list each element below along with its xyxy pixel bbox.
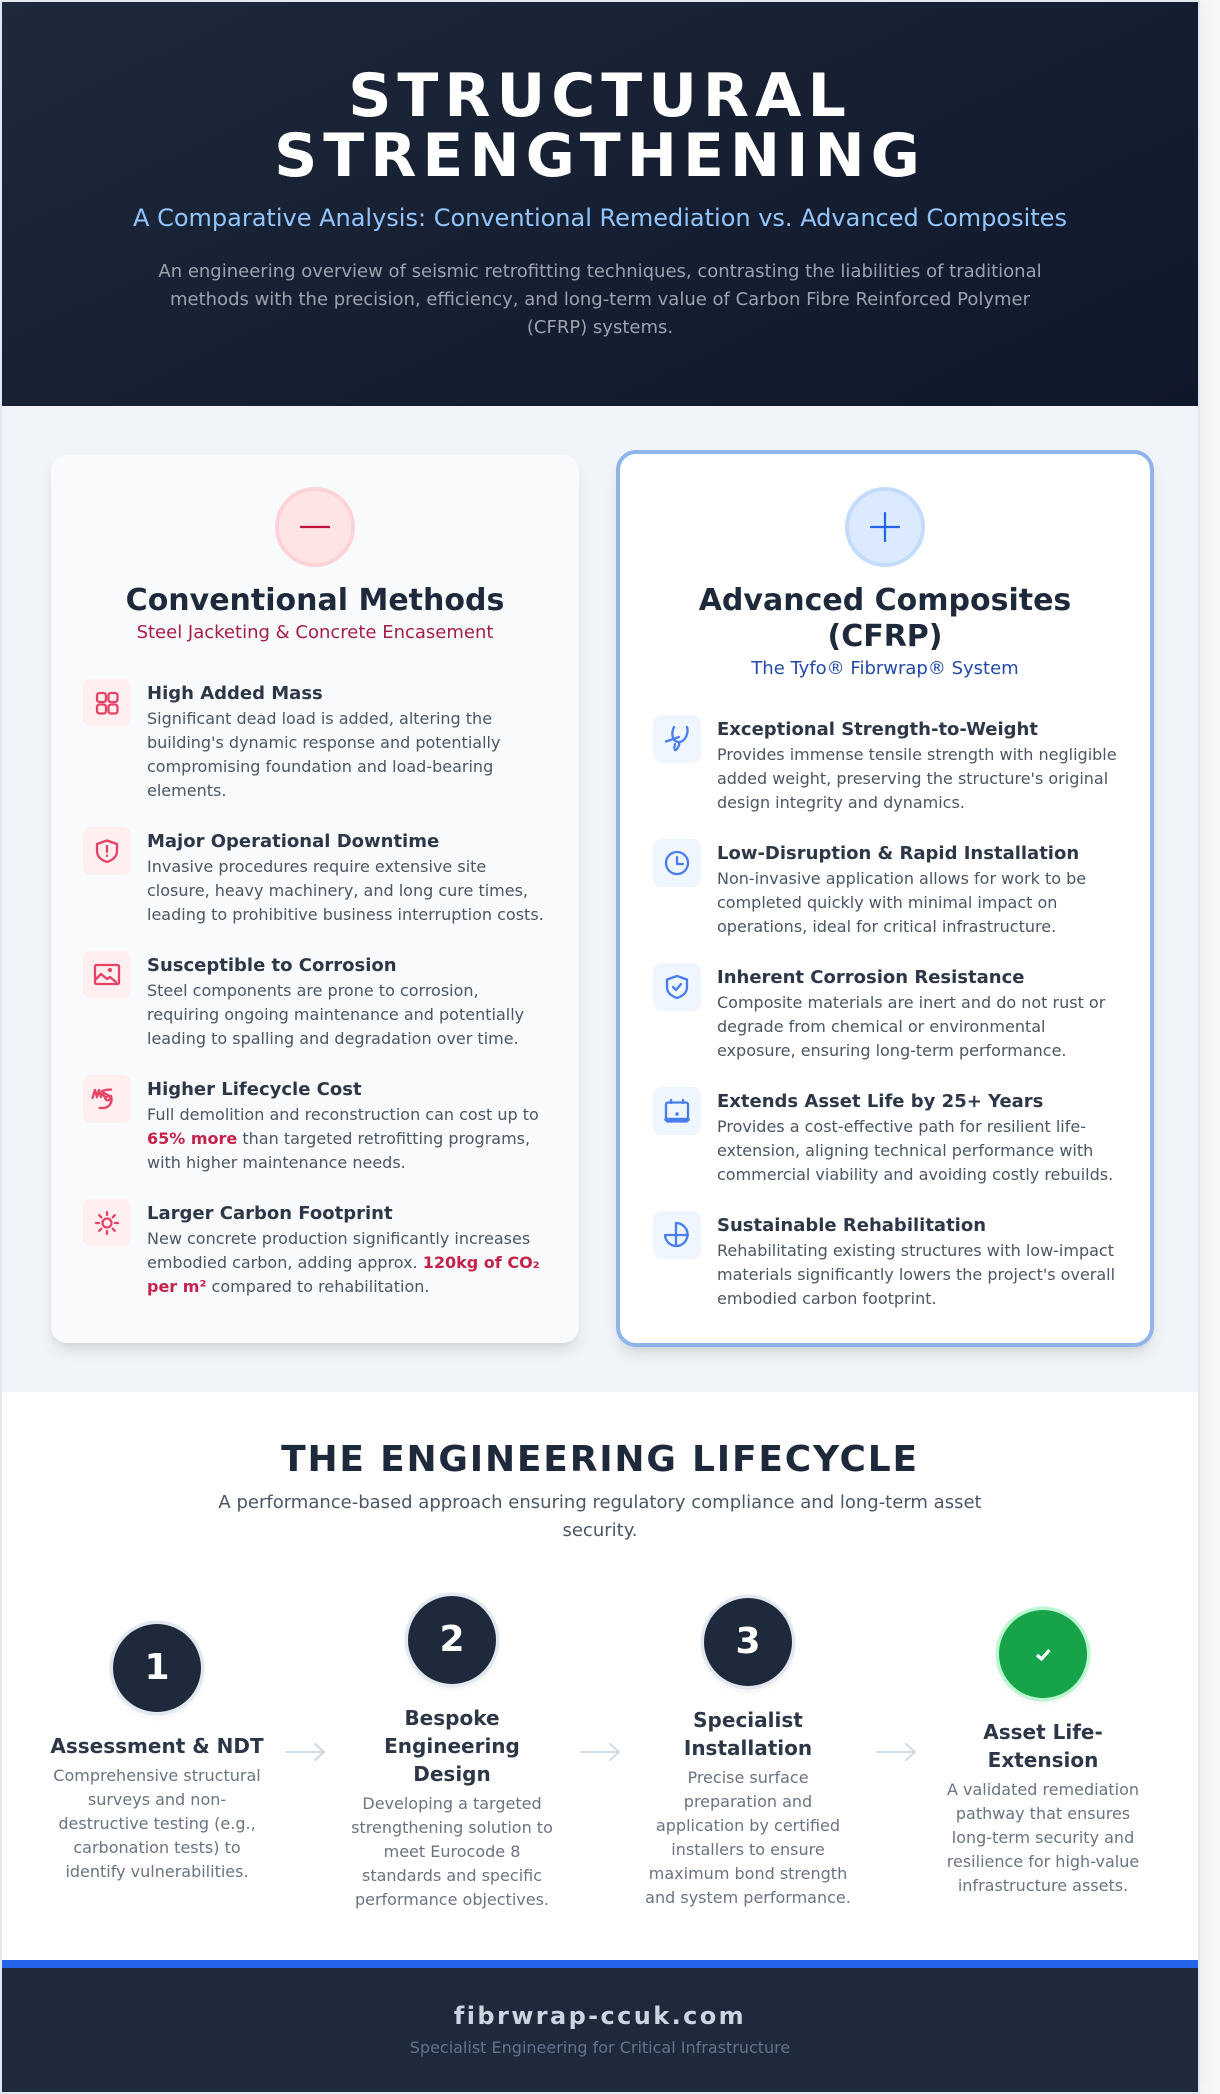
item text: Provides a cost-effective path for resilient life- (717, 1117, 1086, 1136)
step number (113, 1624, 201, 1712)
title: STRENGTHENING (274, 121, 926, 191)
icon: plus circle (845, 487, 925, 567)
step text (351, 1794, 553, 1909)
subtitle: A Comparative Analysis: Conventional Remediation vs. Advanced Composites (133, 204, 1067, 232)
item text: Provides immense tensile strength with negligible (717, 745, 1117, 764)
item text (147, 709, 500, 800)
item text: with higher maintenance needs. (147, 1153, 406, 1172)
step number (704, 1598, 792, 1686)
item text: operations, ideal for critical infrastructure. (717, 917, 1056, 936)
item text: exposure, ensuring long-term performance. (717, 1041, 1067, 1060)
panel: conventional methods (51, 455, 579, 1343)
item: asset life (653, 1087, 1113, 1184)
step text: identify vulnerabilities. (65, 1862, 249, 1881)
item text: elements. (147, 781, 226, 800)
step text: Comprehensive structural (53, 1766, 261, 1785)
step title: Bespoke (404, 1706, 500, 1730)
item text (717, 993, 1106, 1060)
step title: Specialist (693, 1708, 803, 1732)
item text (147, 981, 524, 1048)
step text: carbonation tests) to (73, 1838, 241, 1857)
subheading: The Tyfo® Fibrwrap® System (751, 658, 1019, 679)
item title: High Added Mass (147, 683, 323, 704)
heading: (CFRP) (827, 619, 943, 654)
item text: materials significantly lowers the project's overall (717, 1265, 1115, 1284)
item text: degrade from chemical or environmental (717, 1017, 1046, 1036)
step text (947, 1780, 1139, 1895)
item text: commercial viability and avoiding costly rebuilds. (717, 1165, 1113, 1184)
heading (698, 583, 1071, 654)
step 4 (947, 1606, 1139, 1895)
step text: performance objectives. (355, 1890, 549, 1909)
item text: added weight, preserving the structure's original (717, 769, 1108, 788)
item text: Steel components are prone to corrosion, (147, 981, 479, 1000)
item text: closure, heavy machinery, and long cure times, (147, 881, 528, 900)
lifecycle subheading: security. (562, 1520, 638, 1541)
icon: sun (83, 1199, 131, 1247)
header description (158, 261, 1042, 338)
item text: Rehabilitating existing structures with low-impact (717, 1241, 1114, 1260)
item title: Sustainable Rehabilitation (717, 1215, 986, 1236)
step title (384, 1706, 520, 1786)
footer tagline: Specialist Engineering for Critical Infrastructure (410, 2038, 790, 2057)
step 2 (351, 1592, 553, 1909)
item text: requiring ongoing maintenance and potentially (147, 1005, 524, 1024)
footer website: fibrwrap-ccuk.com (454, 2002, 746, 2030)
arrow 2 (580, 1743, 620, 1761)
step text: infrastructure assets. (958, 1876, 1128, 1895)
step check icon (999, 1610, 1087, 1698)
item text: completed quickly with minimal impact on (717, 893, 1057, 912)
icon: shield check (653, 963, 701, 1011)
item text (717, 869, 1086, 936)
heading: Conventional Methods (126, 583, 504, 618)
lifecycle heading: THE ENGINEERING LIFECYCLE (281, 1439, 919, 1480)
item text (147, 1105, 539, 1172)
item: high added mass (83, 679, 500, 800)
item text: Invasive procedures require extensive site (147, 857, 486, 876)
title (274, 61, 926, 191)
step text: meet Eurocode 8 (384, 1842, 520, 1861)
step text: strengthening solution to (351, 1818, 553, 1837)
lifecycle subheading (218, 1492, 982, 1541)
step text (645, 1768, 851, 1907)
icon: shield alert (83, 827, 131, 875)
item title: Susceptible to Corrosion (147, 955, 397, 976)
item title: Low-Disruption & Rapid Installation (717, 843, 1079, 864)
item: higher lifecycle cost (83, 1075, 539, 1172)
icon: stethoscope squiggle (653, 715, 701, 763)
step text: application by certified (656, 1816, 840, 1835)
step text: long-term security and (952, 1828, 1134, 1847)
header description: methods with the precision, efficiency, and long-term value of Carbon Fibre Reinforced Polymer (170, 289, 1030, 310)
icon: squiggle (83, 1075, 131, 1123)
item text: design integrity and dynamics. (717, 793, 965, 812)
item text (147, 1229, 540, 1296)
step text: maximum bond strength (649, 1864, 847, 1883)
panel: advanced composites (616, 450, 1154, 1347)
title: STRUCTURAL (348, 61, 852, 131)
item text: 65% more than targeted retrofitting programs, (147, 1129, 530, 1148)
icon: image (83, 951, 131, 999)
step text: standards and specific (362, 1866, 542, 1885)
item: low disruption (653, 839, 1086, 936)
step number: 3 (735, 1621, 761, 1662)
item text: building's dynamic response and potentially (147, 733, 500, 752)
arrow 1 (285, 1743, 325, 1761)
item: major operational downtime (83, 827, 544, 924)
item title: Higher Lifecycle Cost (147, 1079, 362, 1100)
step title: Assessment & NDT (50, 1734, 264, 1758)
step text (53, 1766, 261, 1881)
item text: Composite materials are inert and do not rust or (717, 993, 1105, 1012)
step title: Engineering (384, 1734, 520, 1758)
step 3 (645, 1594, 851, 1907)
item title: Exceptional Strength-to-Weight (717, 719, 1038, 740)
icon: minus circle (275, 487, 355, 567)
item text (717, 745, 1117, 812)
item text: leading to spalling and degradation over time. (147, 1029, 519, 1048)
step text: surveys and non- (88, 1790, 226, 1809)
step text: and system performance. (645, 1888, 851, 1907)
step number: 1 (144, 1647, 170, 1688)
item: strength to weight (653, 715, 1117, 812)
item: larger carbon footprint (83, 1199, 540, 1296)
item text (717, 1117, 1113, 1184)
heading: Advanced Composites (699, 583, 1071, 618)
subheading: Steel Jacketing & Concrete Encasement (137, 622, 493, 643)
item title: Inherent Corrosion Resistance (717, 967, 1024, 988)
arrow 3 (876, 1743, 916, 1761)
step title: Extension (988, 1748, 1098, 1772)
step text: resilience for high-value (947, 1852, 1139, 1871)
step title: Installation (684, 1736, 812, 1760)
icon: clock (653, 839, 701, 887)
item text (147, 857, 544, 924)
step text: Precise surface (687, 1768, 809, 1787)
item text: Significant dead load is added, altering the (147, 709, 492, 728)
step text: A validated remediation (947, 1780, 1139, 1799)
item text: Non-invasive application allows for work to be (717, 869, 1086, 888)
item: corrosion resistance (653, 963, 1106, 1060)
item text: per m² compared to rehabilitation. (147, 1277, 429, 1296)
item: susceptible to corrosion (83, 951, 524, 1048)
step 1 (50, 1620, 264, 1881)
item: sustainable (653, 1211, 1115, 1308)
item title: Major Operational Downtime (147, 831, 439, 852)
item text: Full demolition and reconstruction can cost up to (147, 1105, 539, 1124)
item text (717, 1241, 1115, 1308)
icon: grid (83, 679, 131, 727)
icon: calendar (653, 1087, 701, 1135)
lifecycle subheading: A performance-based approach ensuring regulatory compliance and long-term asset (218, 1492, 982, 1513)
comparison background (2, 406, 1198, 1392)
step title (684, 1708, 812, 1760)
step title: Design (413, 1762, 491, 1786)
step text: pathway that ensures (956, 1804, 1130, 1823)
step text: preparation and (684, 1792, 812, 1811)
step text: destructive testing (e.g., (58, 1814, 256, 1833)
step title: Asset Life- (983, 1720, 1103, 1744)
item text: New concrete production significantly increases (147, 1229, 530, 1248)
step text: Developing a targeted (362, 1794, 542, 1813)
footer (2, 1960, 1198, 2092)
item text: embodied carbon, adding approx. 120kg of CO₂ (147, 1253, 540, 1272)
step number (408, 1596, 496, 1684)
header band (2, 2, 1198, 406)
step number: 2 (439, 1619, 465, 1660)
item text: embodied carbon footprint. (717, 1289, 937, 1308)
step title (983, 1720, 1103, 1772)
item title: Extends Asset Life by 25+ Years (717, 1091, 1043, 1112)
item text: compromising foundation and load-bearing (147, 757, 493, 776)
icon: partial globe (653, 1211, 701, 1259)
item text: leading to prohibitive business interruption costs. (147, 905, 544, 924)
header description: (CFRP) systems. (527, 317, 673, 338)
step text: installers to ensure (671, 1840, 825, 1859)
item title: Larger Carbon Footprint (147, 1203, 393, 1224)
header description: An engineering overview of seismic retrofitting techniques, contrasting the liabilities of traditional (158, 261, 1042, 282)
item text: extension, aligning technical performance with (717, 1141, 1093, 1160)
